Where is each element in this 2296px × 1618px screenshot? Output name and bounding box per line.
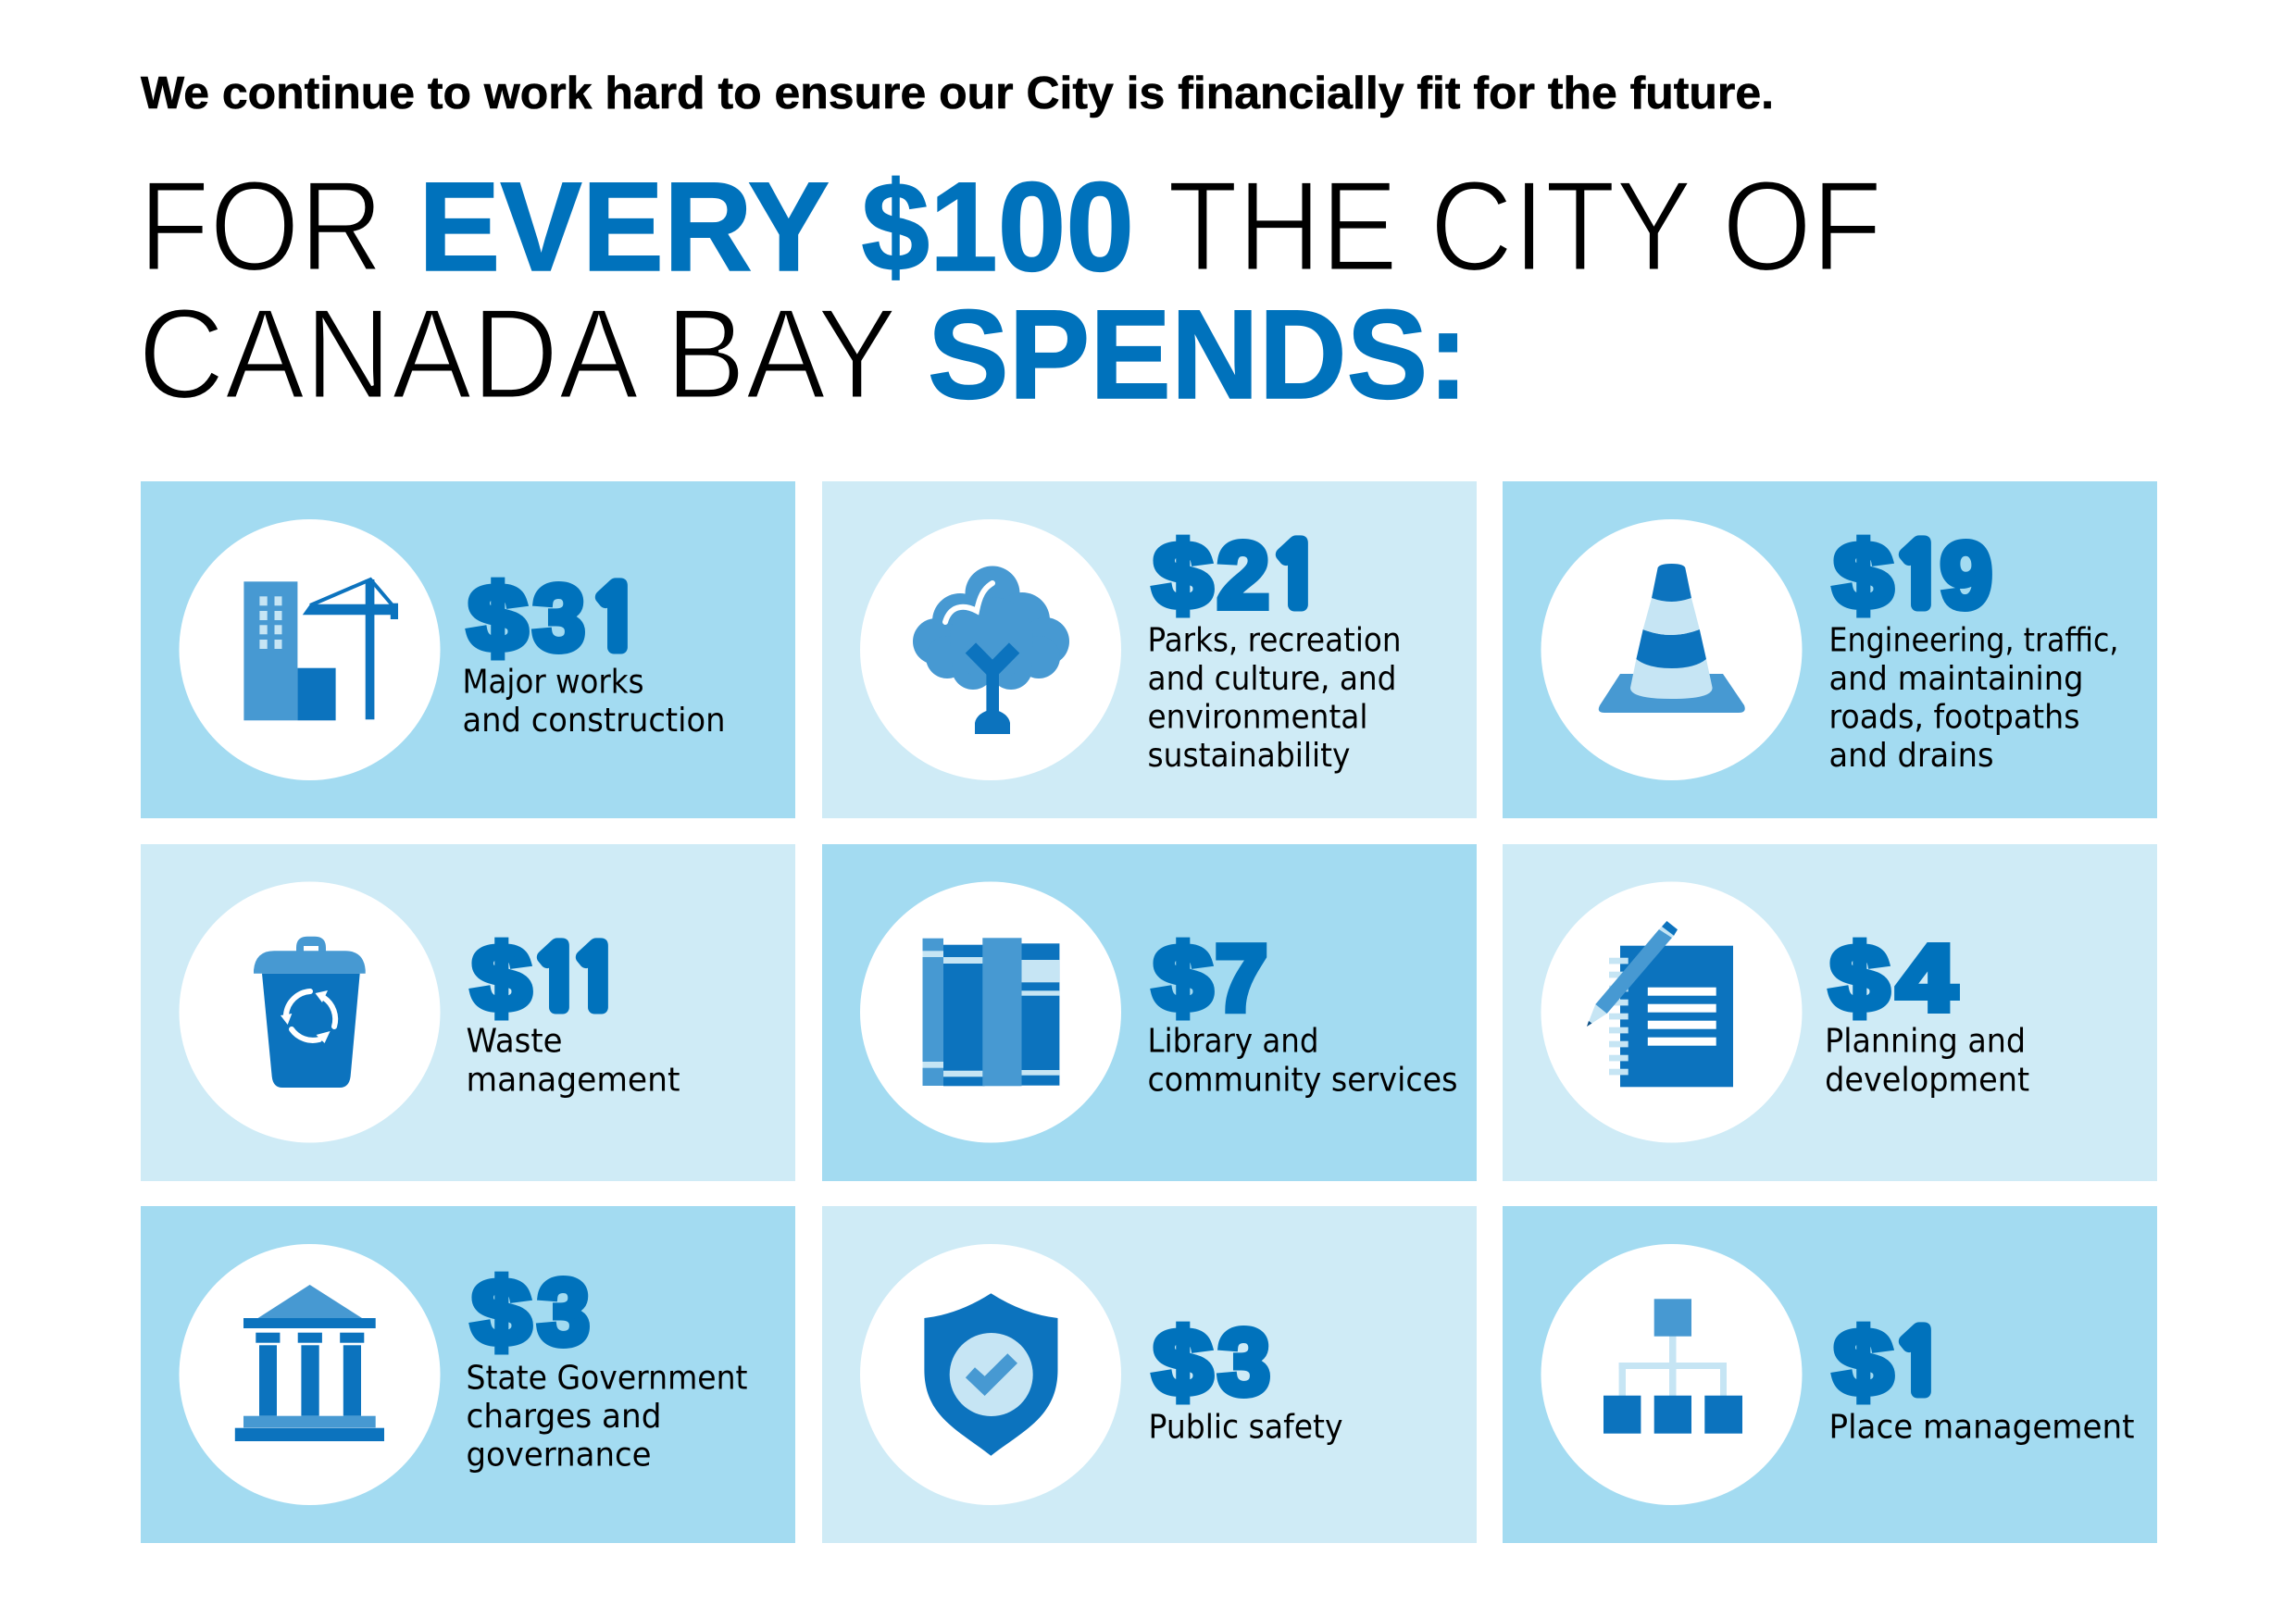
description (467, 1022, 680, 1100)
amount: 1 (1270, 534, 1322, 618)
amount: 1 (590, 577, 642, 661)
description: community services (1148, 1061, 1457, 1100)
amount: $ (468, 566, 527, 670)
amount: 9 (1940, 524, 1992, 628)
icon: shield with check (924, 1293, 1057, 1456)
description: Library and (1148, 1022, 1318, 1061)
icon: notebook and pencil (1587, 921, 1733, 1087)
description (1825, 1022, 2029, 1100)
description: roads, footpaths (1829, 698, 2079, 737)
icon: organisation chart (1603, 1299, 1742, 1434)
description: and drains (1829, 737, 1994, 775)
description: environmental (1148, 698, 1368, 737)
amount: 3 (533, 566, 585, 670)
description: Engineering, traffic, (1829, 622, 2118, 659)
description: State Government (467, 1359, 748, 1398)
icon: government building (235, 1285, 384, 1441)
amount: 1 (531, 937, 583, 1021)
description: development (1825, 1061, 2029, 1100)
description (1148, 622, 1402, 775)
description: management (467, 1061, 680, 1100)
panel: engineering, traffic, roads (1503, 481, 2157, 818)
panel: parks, recreation and culture (822, 481, 1477, 818)
panel: planning and development (1503, 844, 2157, 1181)
panel: major works and construction (141, 481, 795, 818)
icon: traffic cone (1599, 564, 1745, 713)
title: EVERY $100 (418, 156, 1134, 298)
amount: $ (1830, 927, 1889, 1030)
title: CANADA BAY (138, 282, 897, 426)
amount: $ (472, 1261, 530, 1364)
description: Major works (463, 663, 644, 702)
amount: 1 (1893, 534, 1945, 618)
amount: 2 (1217, 524, 1269, 628)
icon: books (922, 938, 1059, 1086)
panel: library and community services (822, 844, 1477, 1181)
icon: building and crane (243, 579, 398, 720)
title: FOR (139, 155, 383, 298)
description: sustainability (1148, 737, 1350, 775)
description: Place management (1829, 1409, 2135, 1446)
title (138, 155, 1882, 426)
amount: 1 (1893, 1321, 1945, 1405)
amount: $ (1154, 524, 1212, 628)
amount: 7 (1216, 927, 1267, 1030)
description: and construction (463, 702, 726, 740)
panel: public safety (822, 1206, 1477, 1543)
panel: place management (1503, 1206, 2157, 1543)
title: SPENDS: (928, 284, 1468, 426)
title: THE CITY OF (1167, 155, 1882, 298)
description: and culture, and (1148, 660, 1396, 698)
icon: recycling bin (254, 937, 366, 1088)
amount: $ (472, 927, 530, 1030)
description: Parks, recreation (1148, 622, 1402, 659)
description: Waste (467, 1022, 563, 1061)
description: Planning and (1825, 1022, 2026, 1061)
amount: 4 (1897, 927, 1956, 1030)
description (1148, 1022, 1457, 1100)
amount: 3 (538, 1261, 590, 1364)
panel: state government charges (141, 1206, 795, 1543)
amount: $ (1154, 1311, 1212, 1414)
amount: 1 (570, 937, 622, 1021)
amount: 3 (1218, 1311, 1270, 1414)
description: Public safety (1148, 1409, 1342, 1446)
description: charges and (467, 1398, 661, 1436)
description: and maintaining (1829, 660, 2083, 698)
panel: waste management (141, 844, 795, 1181)
icon: tree (913, 566, 1069, 734)
intro sentence: We continue to work hard to ensure our City is financially fit for the future. (141, 68, 1774, 118)
amount: $ (1834, 524, 1892, 628)
description: governance (467, 1437, 652, 1474)
amount: $ (1834, 1311, 1892, 1414)
amount: $ (1154, 927, 1212, 1030)
description (1829, 622, 2118, 775)
description (463, 663, 726, 740)
description (467, 1359, 748, 1474)
